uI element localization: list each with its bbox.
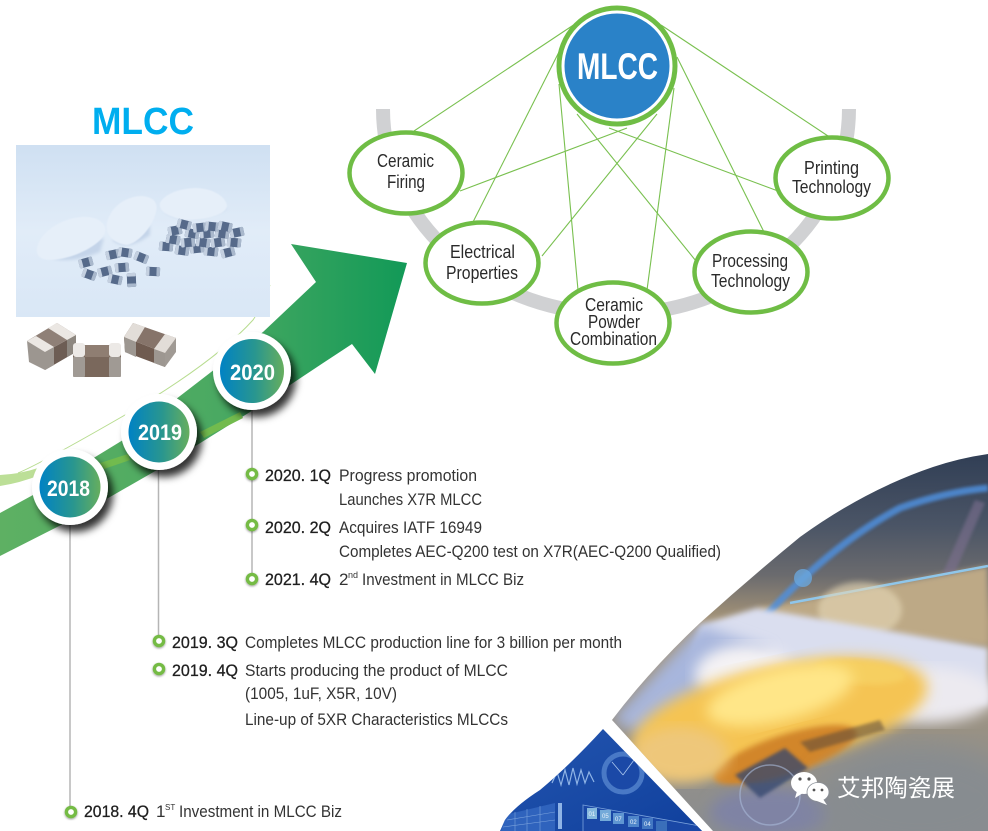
milestones 2019: Starts producing the product of MLCC (245, 661, 508, 680)
node: Electrical Properties: Properties (446, 263, 518, 283)
node: Processing Technology: Processing (712, 251, 788, 271)
milestones 2020: 2021. 4Q (265, 570, 331, 589)
year badge: 2019 (121, 394, 197, 470)
milestones 2019: Line-up of 5XR Characteristics MLCCs (245, 710, 508, 729)
panel: dashboard photo: 01 (588, 812, 596, 818)
node: Processing Technology: Technology (711, 271, 790, 291)
node: Ceramic Powder Combination: Powder (588, 312, 640, 332)
milestones 2020: Completes AEC-Q200 test on X7R(AEC-Q200 Qualified) (339, 542, 721, 561)
connecting lines (414, 24, 828, 290)
milestones 2020: 2020. 2Q (265, 518, 331, 537)
milestones 2019: 2019. 4Q (172, 661, 238, 680)
node: Ceramic Powder Combination (556, 282, 670, 364)
panel: dashboard photo: 02 (630, 820, 637, 826)
year badge: 2020 (213, 332, 291, 410)
panel: dashboard photo: 04 (644, 822, 651, 828)
big green arrow (0, 244, 407, 556)
milestones 2019 (154, 633, 622, 729)
milestones 2018 (66, 802, 342, 821)
milestones 2020: nd (348, 570, 358, 580)
milestones 2018: 2018. 4Q (84, 802, 149, 821)
milestones 2020 (247, 466, 721, 589)
node: Processing Technology (694, 232, 808, 312)
panel: automotive photo (600, 450, 988, 831)
milestones 2020: Investment in MLCC Biz (362, 570, 524, 589)
milestones 2020: Acquires IATF 16949 (339, 518, 482, 537)
node: Ceramic Firing (350, 132, 462, 214)
milestones 2020: 2020. 1Q (265, 466, 331, 485)
panel: dashboard photo (495, 725, 710, 831)
node: Electrical Properties (426, 222, 538, 304)
node: Printing Technology: Printing (804, 158, 859, 178)
light streak behind arrow (0, 468, 40, 486)
milestones 2018: ST (165, 803, 175, 812)
grey arc (383, 109, 849, 314)
milestones 2018: 1 (156, 802, 165, 821)
title: MLCC: MLCC (92, 101, 194, 143)
capacitor chips (27, 323, 176, 377)
panel: dashboard photo: 07 (615, 817, 622, 823)
node: Electrical Properties: Electrical (450, 242, 515, 262)
watermark text: 艾邦陶瓷展 (837, 775, 955, 801)
icon: WeChat bubbles (791, 772, 829, 805)
node: Printing Technology (776, 138, 888, 218)
timeline stems (70, 405, 252, 812)
milestones 2019: Completes MLCC production line for 3 billion per month (245, 633, 622, 652)
milestones 2020: Progress promotion (339, 466, 477, 485)
panel: dashboard photo: 05 (602, 814, 609, 820)
node: Ceramic Powder Combination: Ceramic (585, 295, 643, 315)
milestones 2018: Investment in MLCC Biz (179, 802, 342, 821)
year badge: 2019: 2019 (138, 420, 182, 445)
year badge: 2018: 2018 (47, 476, 90, 501)
node: Ceramic Firing: Ceramic (377, 151, 434, 171)
product photo (16, 145, 270, 317)
year badge: 2020: 2020 (230, 360, 275, 385)
hub: MLCC: MLCC (577, 46, 658, 87)
node: Ceramic Powder Combination: Combination (570, 329, 657, 349)
milestones 2019: 2019. 3Q (172, 633, 238, 652)
node: Ceramic Firing: Firing (387, 172, 425, 192)
year badge: 2018 (32, 449, 108, 525)
thin curve line (18, 285, 270, 473)
milestones 2020: 2 (339, 570, 348, 589)
milestones 2020: Launches X7R MLCC (339, 490, 482, 509)
milestones 2019: (1005, 1uF, X5R, 10V) (245, 684, 397, 703)
hub: MLCC (559, 8, 675, 124)
node: Printing Technology: Technology (792, 177, 871, 197)
